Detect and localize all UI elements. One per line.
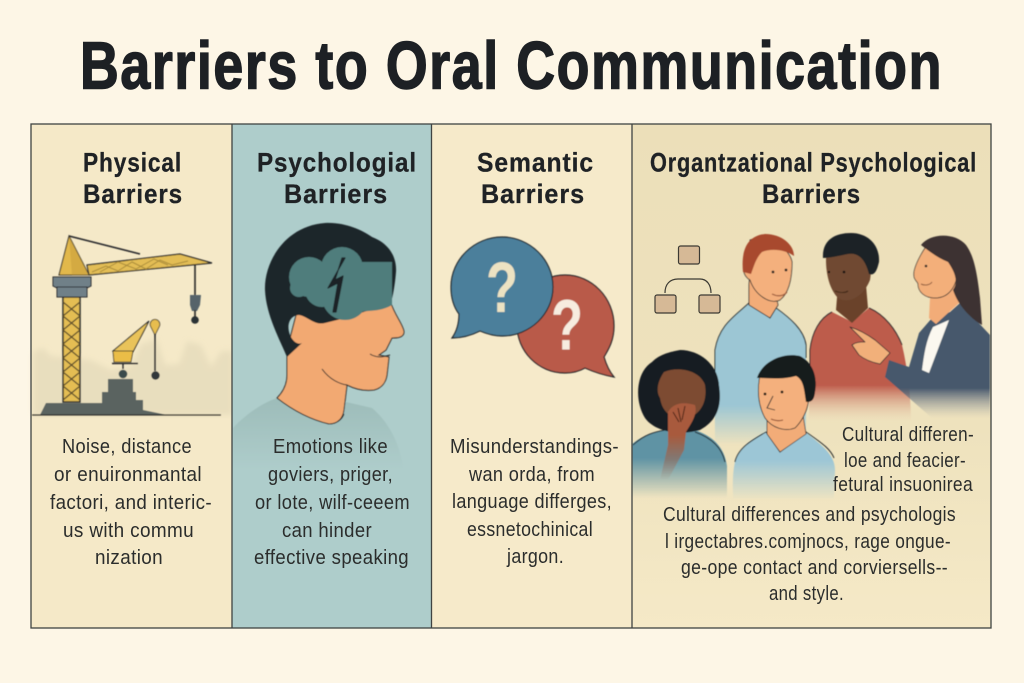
text: organizational description: Cultural differences and psychologis — [663, 503, 956, 526]
text: psychological description: or lote, wilf-ceeem — [255, 491, 410, 514]
person: woman in jacket — [850, 236, 990, 418]
storm cloud — [289, 247, 392, 320]
text: semantic description: Misunderstandings- — [450, 435, 619, 458]
text: organizational description: l irgectabres.comjnocs, rage ongue- — [665, 530, 951, 553]
red question mark: ? — [551, 286, 583, 366]
text: semantic description: wan orda, from — [468, 463, 595, 486]
illustration: group of people — [632, 233, 990, 500]
text: organizational description — [663, 503, 956, 605]
heading: psychological barriers: Barriers — [284, 179, 388, 209]
text: physical description: us with commu — [63, 519, 194, 542]
person: curly-haired woman — [632, 350, 727, 500]
heading: psychological barriers — [257, 148, 417, 209]
person: red-haired man — [715, 234, 806, 445]
text: psychological description: can hinder — [282, 519, 372, 542]
text: inset cultural note — [833, 423, 974, 496]
hair — [265, 223, 396, 357]
text: inset cultural note: fetural insuonirea — [833, 473, 973, 496]
text: semantic description: language differges, — [452, 490, 612, 513]
face — [277, 260, 404, 424]
hand — [850, 327, 890, 364]
shirt — [233, 398, 404, 475]
heading: psychological barriers: Psychologial — [257, 148, 417, 178]
heading: semantic barriers: Semantic — [477, 148, 594, 178]
blue question mark: ? — [486, 249, 518, 328]
text: psychological description: Emotions like — [273, 435, 388, 458]
text: psychological description: goviers, priger, — [268, 463, 393, 486]
text: organizational description: ge-ope contact and corviersells-- — [681, 556, 948, 579]
lightning bolt — [328, 258, 345, 312]
text: physical description — [50, 435, 212, 569]
icon: construction cranes — [32, 236, 233, 415]
text: semantic description: jargon. — [506, 545, 564, 568]
heading: organizational barriers: Barriers — [762, 179, 861, 209]
text: inset cultural note: Cultural differen- — [842, 423, 974, 446]
blue bubble — [451, 237, 553, 338]
person: dark-skinned man in red shirt — [809, 233, 911, 422]
text: semantic description: essnetochinical — [467, 518, 593, 541]
red bubble — [517, 275, 614, 377]
mouth and jaw lines — [322, 354, 390, 385]
panel borders — [31, 124, 991, 628]
icon: head with storm cloud — [233, 223, 404, 475]
text: inset cultural note: loe and feacier- — [844, 449, 966, 472]
person: man in light blue shirt — [733, 355, 835, 500]
heading: physical barriers: Physical — [83, 148, 182, 178]
text: organizational description: and style. — [769, 582, 844, 605]
panel: psychological barriers — [232, 124, 431, 628]
text: psychological description: effective speaking — [254, 546, 409, 569]
text: psychological description — [254, 435, 410, 569]
text: physical description: factori, and interic- — [50, 491, 212, 514]
text: physical description: or enuironmantal — [54, 463, 202, 486]
text: physical description: Noise, distance — [62, 435, 192, 458]
heading: semantic barriers: Barriers — [481, 179, 585, 209]
text: semantic description — [450, 435, 619, 568]
heading: semantic barriers — [477, 148, 594, 209]
icon: org chart — [655, 246, 720, 313]
panel: organizational psychological barriers — [632, 124, 991, 628]
panel: semantic barriers — [431, 124, 632, 628]
heading: physical barriers: Barriers — [83, 179, 183, 209]
heading: physical barriers — [83, 148, 183, 209]
text: physical description: nization — [95, 546, 163, 569]
icon: speech bubbles with question marks — [451, 237, 614, 377]
panel: physical barriers — [31, 124, 233, 628]
heading: organizational barriers — [650, 148, 977, 209]
